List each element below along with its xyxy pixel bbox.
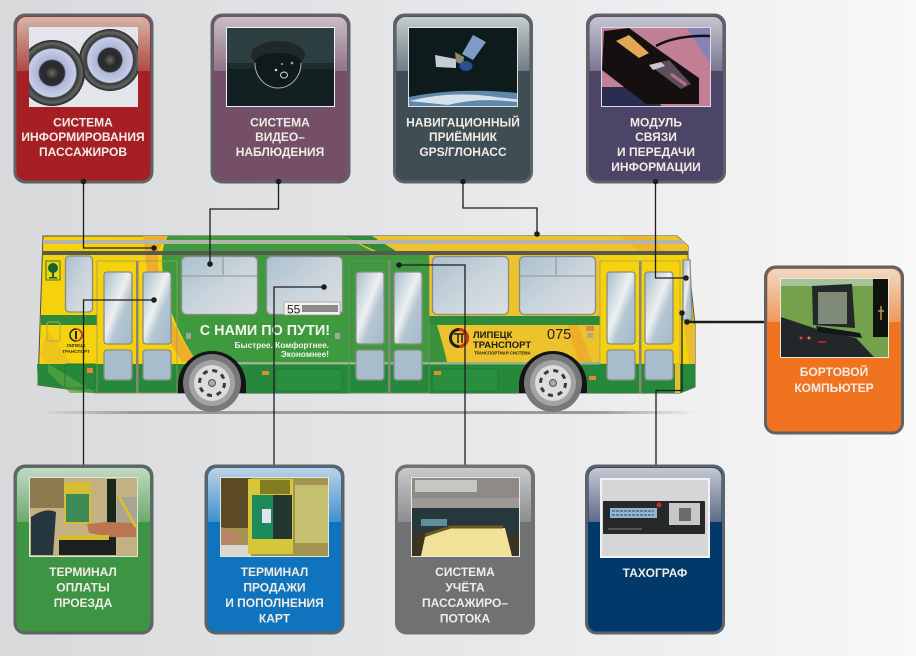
label: КАРТ [259, 612, 291, 626]
card: on-board computer [766, 267, 902, 433]
right logo: ТРАНСПОРТ [473, 340, 531, 351]
slogan: www.ltsystems.ru [280, 376, 336, 383]
door posts [136, 261, 138, 393]
label: ПАССАЖИРОВ [39, 145, 127, 159]
lower green bands [37, 364, 695, 393]
bus shadow on ground [40, 411, 695, 414]
card: video surveillance system [212, 15, 349, 182]
label: ПАССАЖИРО– [422, 596, 508, 610]
roof stripes [43, 240, 683, 244]
bus [37, 236, 695, 412]
destination plate: 55 [287, 302, 301, 316]
wheel: rear [178, 351, 246, 412]
photo: speakers [29, 27, 138, 107]
wheel: front [519, 351, 587, 412]
left logo: ЛИПЕЦК [67, 343, 86, 348]
label: СИСТЕМА [250, 116, 310, 130]
lower panels and markers [276, 369, 342, 391]
label: И ПОПОЛНЕНИЯ [225, 596, 324, 610]
left logo: ТРАНСПОРТ [62, 349, 90, 354]
slogan: С НАМИ ПО ПУТИ! [200, 323, 330, 339]
upper orange and green bands [143, 236, 197, 362]
photo: on-board computer in cab [780, 278, 889, 358]
right logo: 075 [547, 327, 571, 343]
slogan [200, 323, 336, 383]
photo: tachograph device [600, 478, 710, 558]
label: ТЕРМИНАЛ [241, 565, 308, 579]
slogan: Экономнее! [281, 349, 329, 359]
photo: validator in bus [29, 477, 138, 557]
photo: sale terminal [220, 477, 329, 557]
label: НАБЛЮДЕНИЯ [236, 145, 324, 159]
right door panels [600, 261, 680, 364]
label: КОМПЬЮТЕР [794, 381, 874, 395]
label: БОРТОВОЙ [800, 364, 868, 379]
right logo: ЛИПЕЦК [473, 330, 513, 341]
card: tachograph [586, 466, 724, 633]
photo: modem device [601, 27, 711, 107]
label: ТЕРМИНАЛ [49, 565, 117, 579]
photo: dome camera [226, 27, 335, 107]
card: fare payment terminal [15, 466, 152, 633]
label: ПРОДАЖИ [243, 580, 306, 594]
label: МОДУЛЬ [630, 116, 682, 130]
yellow advertising panel [429, 255, 600, 362]
coat of arms [46, 261, 60, 280]
label: ВИДЕО– [255, 130, 305, 144]
label: ПРОЕЗДА [54, 596, 113, 610]
card: communication module [588, 15, 724, 182]
card: passenger information system [15, 15, 152, 182]
label: НАВИГАЦИОННЫЙ [406, 114, 520, 130]
label: ИНФОРМАЦИИ [611, 160, 701, 174]
bus windows [66, 256, 692, 380]
right logo [450, 327, 571, 356]
label: ОПЛАТЫ [56, 580, 110, 594]
photo: door sensor [411, 477, 520, 557]
right logo: ТРАНСПОРТНАЯ СИСТЕМА [474, 350, 531, 356]
label: СИСТЕМА [53, 116, 113, 130]
connector lines [84, 182, 766, 467]
destination plate [284, 302, 340, 316]
label: ПРИЁМНИК [429, 129, 498, 144]
label: ПОТОКА [440, 612, 490, 626]
card: GPS/GLONASS navigation receiver [394, 15, 532, 182]
label: СИСТЕМА [435, 565, 495, 579]
label: СВЯЗИ [635, 130, 677, 144]
card: passenger flow counting system [396, 466, 534, 633]
label: ТАХОГРАФ [623, 566, 687, 580]
label: GPS/ГЛОНАСС [419, 145, 507, 159]
photo: satellite [408, 27, 518, 107]
label: И ПЕРЕДАЧИ [617, 145, 695, 159]
left logo [62, 329, 90, 354]
connector dots [81, 179, 690, 325]
bus body base [38, 236, 695, 393]
card: card sale and top-up terminal [206, 466, 343, 633]
label: УЧЁТА [445, 580, 485, 594]
label: ИНФОРМИРОВАНИЯ [21, 130, 145, 144]
slogan: Быстрее. Комфортнее. [235, 340, 329, 350]
